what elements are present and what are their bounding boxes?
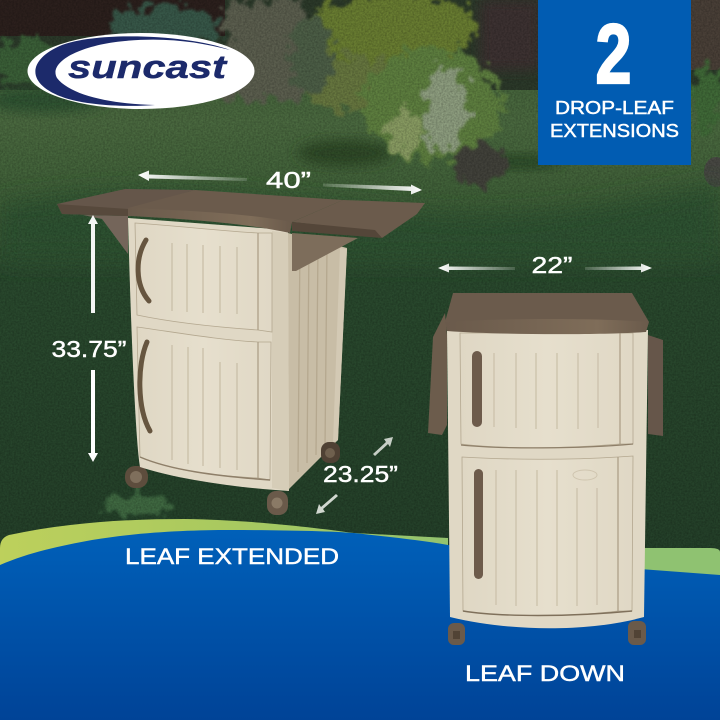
lower door <box>462 456 633 616</box>
corner post shading <box>272 231 289 491</box>
dimension: 40 inch width: 40” <box>266 167 311 193</box>
logo: Suncast <box>28 33 254 109</box>
dimension: 33.75 inch height <box>52 215 126 462</box>
blue footer band with green swoosh <box>0 519 720 720</box>
left leaf bracket <box>83 215 128 254</box>
left caster <box>448 623 465 645</box>
dimension: 40 inch width <box>138 167 422 194</box>
label: leaf extended: LEAF EXTENDED <box>125 544 339 569</box>
badge: 2 drop-leaf extensions <box>538 0 691 165</box>
table top and leaves <box>57 189 425 238</box>
badge: 2 drop-leaf extensions: DROP-LEAF <box>555 98 674 118</box>
rear caster <box>321 442 340 463</box>
dimension: 22 inch width: 22” <box>532 252 572 278</box>
left folded leaf <box>428 313 447 435</box>
cart side panel <box>288 233 347 490</box>
cart front frame <box>447 330 648 628</box>
upper door <box>460 333 633 448</box>
badge: 2 drop-leaf extensions: EXTENSIONS <box>550 121 679 141</box>
badge: 2 drop-leaf extensions: 2 <box>596 7 632 101</box>
table top <box>445 293 649 334</box>
dimension: 23.25 inch depth: 23.25” <box>323 461 398 487</box>
right folded leaf <box>648 335 663 436</box>
label: leaf down: LEAF DOWN <box>465 661 625 686</box>
cart: leaf extended <box>57 189 425 515</box>
front right caster <box>267 491 288 515</box>
dimension: 22 inch width <box>438 252 652 278</box>
right leaf bracket <box>292 233 358 271</box>
upper door <box>135 223 272 332</box>
logo: Suncast: suncast <box>68 49 228 85</box>
cart: leaf down <box>428 293 663 645</box>
cart front frame <box>128 218 289 491</box>
dimension: 23.25 inch depth <box>316 437 398 514</box>
dimension: 33.75 inch height: 33.75” <box>52 336 126 362</box>
lower door <box>137 327 271 480</box>
front left caster <box>125 466 148 488</box>
right caster <box>628 621 646 645</box>
